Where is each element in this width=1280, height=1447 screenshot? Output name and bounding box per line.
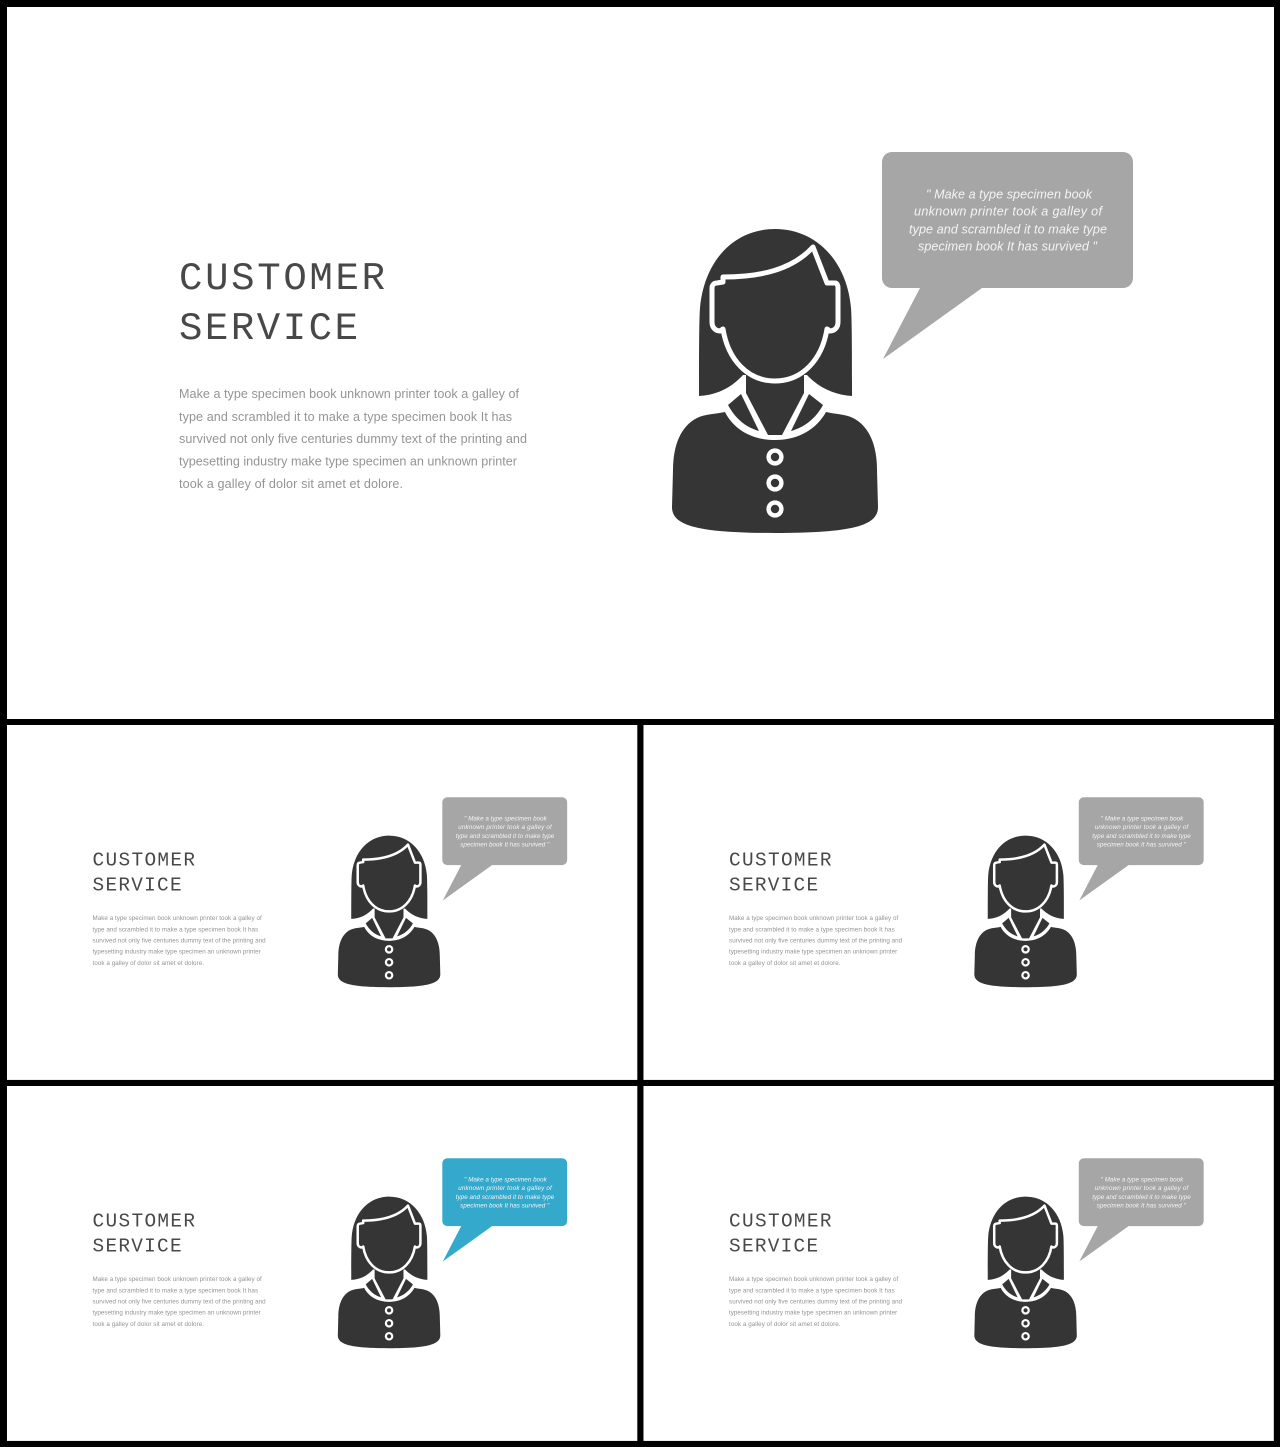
title — [179, 257, 385, 351]
title: SERVICE — [729, 874, 818, 896]
title — [93, 1211, 195, 1257]
body text: Make a type specimen book unknown printer took a galley of — [729, 915, 898, 922]
body text: survived not only five centuries dummy text of the printing and — [93, 937, 266, 944]
body text: Make a type specimen book unknown printer took a galley of — [179, 387, 520, 401]
speech bubble: blue: unknown printer took a galley of — [458, 1185, 553, 1192]
panel: slide 5 — [643, 1086, 1274, 1441]
body text — [729, 1276, 903, 1328]
speech bubble: type and scrambled it to make type — [1092, 833, 1191, 840]
body text: Make a type specimen book unknown printer took a galley of — [729, 1276, 898, 1283]
title: CUSTOMER — [729, 1211, 832, 1233]
speech bubble: blue: specimen book It has survived " — [460, 1202, 550, 1209]
body text: survived not only five centuries dummy text of the printing and — [729, 937, 903, 944]
body text: type and scrambled it to make a type specimen book It has — [93, 926, 258, 933]
body text — [729, 915, 903, 967]
body text: survived not only five centuries dummy text of the printing and — [179, 432, 527, 446]
speech bubble: unknown printer took a galley of — [1095, 824, 1189, 831]
slide background — [643, 1086, 1274, 1441]
body text: Make a type specimen book unknown printer took a galley of — [93, 1276, 262, 1283]
body text: took a galley of dolor sit amet et dolore. — [93, 960, 204, 967]
speech bubble: type and scrambled it to make type — [456, 833, 555, 840]
panel: main slide — [7, 7, 1274, 719]
body text: Make a type specimen book unknown printer took a galley of — [93, 915, 262, 922]
body text: took a galley of dolor sit amet et dolore. — [729, 1321, 841, 1328]
panel: slide 4 with blue bubble — [7, 1086, 637, 1441]
slide background — [7, 725, 637, 1080]
title: SERVICE — [729, 1235, 818, 1257]
speech bubble: specimen book It has survived " — [1097, 841, 1187, 848]
body text — [93, 915, 266, 967]
icon: customer service woman — [974, 836, 1077, 987]
body text: took a galley of dolor sit amet et dolore. — [729, 960, 841, 967]
title: SERVICE — [93, 874, 182, 896]
body text: typesetting industry make type specimen an unknown printer — [729, 949, 897, 956]
speech bubble: type and scrambled it to make type — [909, 222, 1107, 236]
icon: customer service woman — [338, 836, 440, 987]
slide background — [643, 725, 1274, 1080]
title: SERVICE — [179, 307, 358, 351]
body text — [93, 1276, 266, 1328]
body text: typesetting industry make type specimen an unknown printer — [93, 1310, 261, 1317]
icon: customer service woman — [974, 1197, 1077, 1348]
title — [729, 850, 832, 896]
slide background — [7, 7, 1274, 719]
title — [729, 1211, 832, 1257]
speech bubble: unknown printer took a galley of — [1095, 1185, 1189, 1192]
body text: survived not only five centuries dummy text of the printing and — [729, 1298, 903, 1305]
speech bubble: " Make a type specimen book — [1101, 815, 1184, 822]
body text: typesetting industry make type specimen an unknown printer — [729, 1310, 897, 1317]
speech bubble — [882, 152, 1133, 359]
body text — [179, 387, 527, 491]
body text: survived not only five centuries dummy text of the printing and — [93, 1298, 266, 1305]
speech bubble: unknown printer took a galley of — [458, 824, 553, 831]
panel: slide 3 — [643, 725, 1274, 1080]
speech bubble — [1079, 1158, 1204, 1261]
body text: took a galley of dolor sit amet et dolore. — [179, 477, 403, 491]
speech bubble: specimen book It has survived " — [918, 240, 1098, 254]
speech bubble: blue: type and scrambled it to make type — [456, 1194, 555, 1201]
body text: type and scrambled it to make a type specimen book It has — [729, 926, 895, 933]
speech bubble: unknown printer took a galley of — [914, 204, 1104, 218]
title: CUSTOMER — [729, 850, 832, 872]
body text: type and scrambled it to make a type specimen book It has — [729, 1287, 895, 1294]
body text: took a galley of dolor sit amet et dolore. — [93, 1321, 204, 1328]
speech bubble — [1079, 797, 1204, 900]
title: SERVICE — [93, 1235, 182, 1257]
speech bubble: " Make a type specimen book — [464, 815, 548, 822]
speech bubble: type and scrambled it to make type — [1092, 1194, 1191, 1201]
body text: typesetting industry make type specimen an unknown printer — [179, 454, 517, 468]
panel: slide 2 — [7, 725, 637, 1080]
speech bubble: blue — [442, 1158, 567, 1261]
title: CUSTOMER — [179, 257, 385, 301]
speech bubble: specimen book It has survived " — [1097, 1202, 1187, 1209]
title: CUSTOMER — [93, 850, 195, 872]
icon: customer service woman — [338, 1197, 440, 1348]
title: CUSTOMER — [93, 1211, 195, 1233]
speech bubble: blue: " Make a type specimen book — [464, 1176, 548, 1183]
body text: typesetting industry make type specimen an unknown printer — [93, 949, 261, 956]
body text: type and scrambled it to make a type specimen book It has — [179, 410, 512, 424]
speech bubble — [442, 797, 567, 900]
slide background — [7, 1086, 637, 1441]
title — [93, 850, 195, 896]
speech bubble: " Make a type specimen book — [1101, 1176, 1184, 1183]
body text: type and scrambled it to make a type specimen book It has — [93, 1287, 258, 1294]
speech bubble: " Make a type specimen book — [926, 188, 1093, 202]
speech bubble: specimen book It has survived " — [460, 841, 550, 848]
icon: customer service woman — [672, 229, 878, 533]
